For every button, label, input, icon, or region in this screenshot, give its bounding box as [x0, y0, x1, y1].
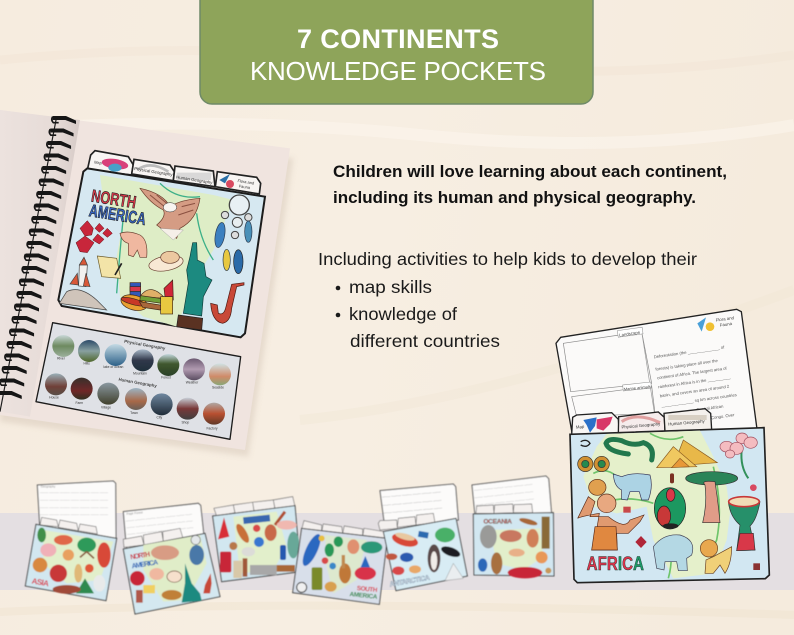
- worksheet behind pocket: [556, 309, 757, 440]
- title line 2: KNOWLEDGE POCKETS: [250, 56, 546, 86]
- icon: space shuttle: [59, 257, 107, 310]
- notebook page: [0, 110, 290, 450]
- lavender grey band: [0, 513, 794, 590]
- icon: scroll: [97, 256, 122, 278]
- photo labels: [49, 356, 224, 430]
- Asia pocket: _____ ______ ______ _____ ______ _____ _____: [39, 512, 108, 516]
- activities list: knowledge of: [349, 304, 457, 324]
- flora and fauna corner: Fauna: [719, 321, 733, 328]
- flora and fauna corner: [697, 315, 735, 332]
- small tribal marks: [581, 440, 760, 570]
- Asia pocket: _____ ______ ______ _____ ______ _____ _____: [39, 497, 108, 501]
- Oceania pocket: _____ ______ ______ _____ ______ _____: [474, 495, 534, 506]
- human geography photo row: [45, 373, 225, 425]
- icon: food: [119, 280, 173, 314]
- North America pocket: _____ ______ ______ _____ ______ _____ ____: [125, 511, 192, 522]
- photo labels: Farm: [75, 401, 83, 405]
- South America lettering: SOUTH: [356, 585, 378, 594]
- photo labels: Hills: [84, 362, 90, 366]
- tab labels: [94, 159, 255, 190]
- spiral binding: [0, 116, 76, 412]
- North America pocket: Page Forest: [126, 510, 143, 516]
- icon: pink flower: [720, 433, 757, 478]
- icon: earrings: [578, 456, 609, 472]
- pocket tabs: [572, 409, 712, 435]
- landscape label: [617, 327, 643, 338]
- North America map panel: [58, 168, 265, 337]
- worksheet paragraph: rainforest in Africa is in the __________: [658, 374, 731, 389]
- Antarctica pocket: [378, 484, 467, 591]
- tab labels: Fauna: [239, 183, 251, 190]
- photo labels: City: [156, 415, 163, 419]
- South America pocket: AMERICA: [349, 591, 378, 601]
- Antarctica lettering: ANTARCTICA: [389, 575, 430, 589]
- icon: lion: [700, 540, 732, 573]
- tab labels: [576, 418, 706, 430]
- photo labels: lake or ocean: [103, 365, 123, 369]
- icon: drum: [728, 497, 760, 551]
- icon: Statue of Liberty: [177, 243, 212, 330]
- notebook with North America pocket: [0, 110, 293, 457]
- photo labels: Town: [130, 411, 138, 415]
- Oceania pocket: _____ ______ ______ _____ ______ _____: [473, 488, 534, 498]
- worksheet paragraph: forests) is taking place all over the: [655, 358, 719, 372]
- North America pocket: AMERICA: [131, 559, 159, 570]
- North America map panel: AMERICA: [88, 200, 148, 229]
- North America pocket: _____ ______ ______ _____ ______ _____ ____: [126, 524, 194, 535]
- activities list: different countries: [350, 331, 500, 351]
- intro text: [333, 162, 727, 207]
- worksheet paragraph: Deforestation (the ______________ of: [653, 344, 725, 359]
- tab labels: Map: [94, 159, 103, 166]
- tab labels: Human Geography: [176, 174, 214, 185]
- South America pocket: [293, 521, 387, 604]
- icon: saxophone: [211, 283, 244, 323]
- photo labels: Mountain: [133, 372, 147, 376]
- Antarctica pocket: _____ ______ ______ _____ ______ _____: [382, 505, 442, 514]
- title line 1: 7 CONTINENTS: [297, 24, 499, 54]
- icon: bear: [120, 232, 147, 257]
- Oceania lettering: OCEANIA: [483, 518, 512, 525]
- tabs: [87, 151, 261, 194]
- North America pocket: _____ ______ ______ _____ ______ _____ ____: [125, 517, 193, 528]
- intro text: including its human and physical geography.: [333, 188, 696, 207]
- tab labels: Flora and: [237, 178, 255, 186]
- photo labels: Shop: [181, 421, 189, 425]
- Asia lettering: ASIA: [31, 576, 50, 588]
- Antarctica pocket: _____ ______ ______ _____ ______ _____: [381, 489, 441, 498]
- photo labels: River: [57, 356, 66, 360]
- icon: elephant: [653, 535, 693, 571]
- physical geography photo row: [52, 335, 231, 385]
- icon: woman with pot: [578, 479, 644, 550]
- icon: tribal mask: [654, 488, 686, 529]
- tab labels: Map: [576, 424, 585, 430]
- human geography heading: Human Geography: [118, 377, 158, 388]
- icon: baobab tree: [686, 472, 738, 523]
- Asia pocket: Geography: [41, 484, 56, 488]
- tab labels: Physical Geography: [134, 166, 174, 177]
- icon: pyramids: [657, 440, 717, 468]
- activities list: Including activities to help kids to develop their: [318, 249, 697, 269]
- icon: snake: [606, 439, 652, 460]
- photo labels: Weather: [186, 381, 199, 385]
- worksheet paragraph: continent of Africa. The largest area of: [657, 365, 728, 380]
- Oceania pocket: [472, 476, 554, 578]
- icon: cowboy hat: [148, 251, 184, 274]
- photo labels: Seaside: [212, 386, 224, 390]
- North America lettering: NORTH: [90, 186, 138, 212]
- flora and fauna corner: Flora and: [715, 315, 735, 323]
- worksheet paragraph: [653, 344, 737, 421]
- worksheet paragraph: ______________ Central African: [662, 403, 724, 417]
- Asia pocket: _____ ______ ______ _____ ______ _____ _____: [39, 504, 108, 508]
- Europe pocket: [213, 497, 301, 582]
- activities list: [318, 249, 697, 351]
- Asia pocket: [25, 481, 117, 601]
- worksheet paragraph: of Congo. Over: [706, 412, 735, 421]
- row of small continent pockets, left group: [25, 481, 301, 614]
- landscape label: Landscape: [619, 330, 641, 338]
- worksheet paragraph: basin, and covers an area of around 2: [659, 384, 730, 398]
- icon: eagle: [140, 188, 200, 240]
- tab labels: Human Geography: [668, 418, 706, 427]
- worksheet paragraph: ______________ sq km across countries: [660, 392, 737, 408]
- marine label: Marine animals: [624, 384, 651, 392]
- Africa map panel: [570, 428, 769, 583]
- Africa lettering: AFRICA: [587, 554, 644, 575]
- photo labels: House: [49, 396, 59, 400]
- photo labels: Village: [101, 406, 111, 410]
- icon: dream catcher: [213, 195, 252, 274]
- Oceania pocket: _____ ______ ______ _____ ______ _____: [473, 481, 533, 491]
- Africa knowledge pocket: [556, 309, 769, 583]
- Antarctica pocket: _____ ______ ______ _____ ______ _____: [381, 497, 442, 506]
- photo labels: Forest: [161, 376, 171, 380]
- row of small continent pockets, right group: [293, 476, 554, 604]
- activities list: map skills: [349, 277, 432, 297]
- tab labels: Physical Geography: [621, 421, 661, 430]
- North America lettering: NORTH: [130, 551, 151, 561]
- icon: rhino: [613, 474, 651, 500]
- photo labels: Factory: [206, 426, 218, 430]
- intro text: Children will love learning about each continent,: [333, 162, 727, 181]
- physical geography heading: Physical Geography: [124, 339, 166, 351]
- North America pocket: [123, 503, 220, 614]
- icon: maple leaves: [76, 221, 112, 253]
- Asia pocket: _____ ______ ______ _____ ______ _____ _____: [39, 490, 108, 494]
- title banner: [200, 0, 593, 104]
- panel: physical and human geography photos: [36, 323, 241, 439]
